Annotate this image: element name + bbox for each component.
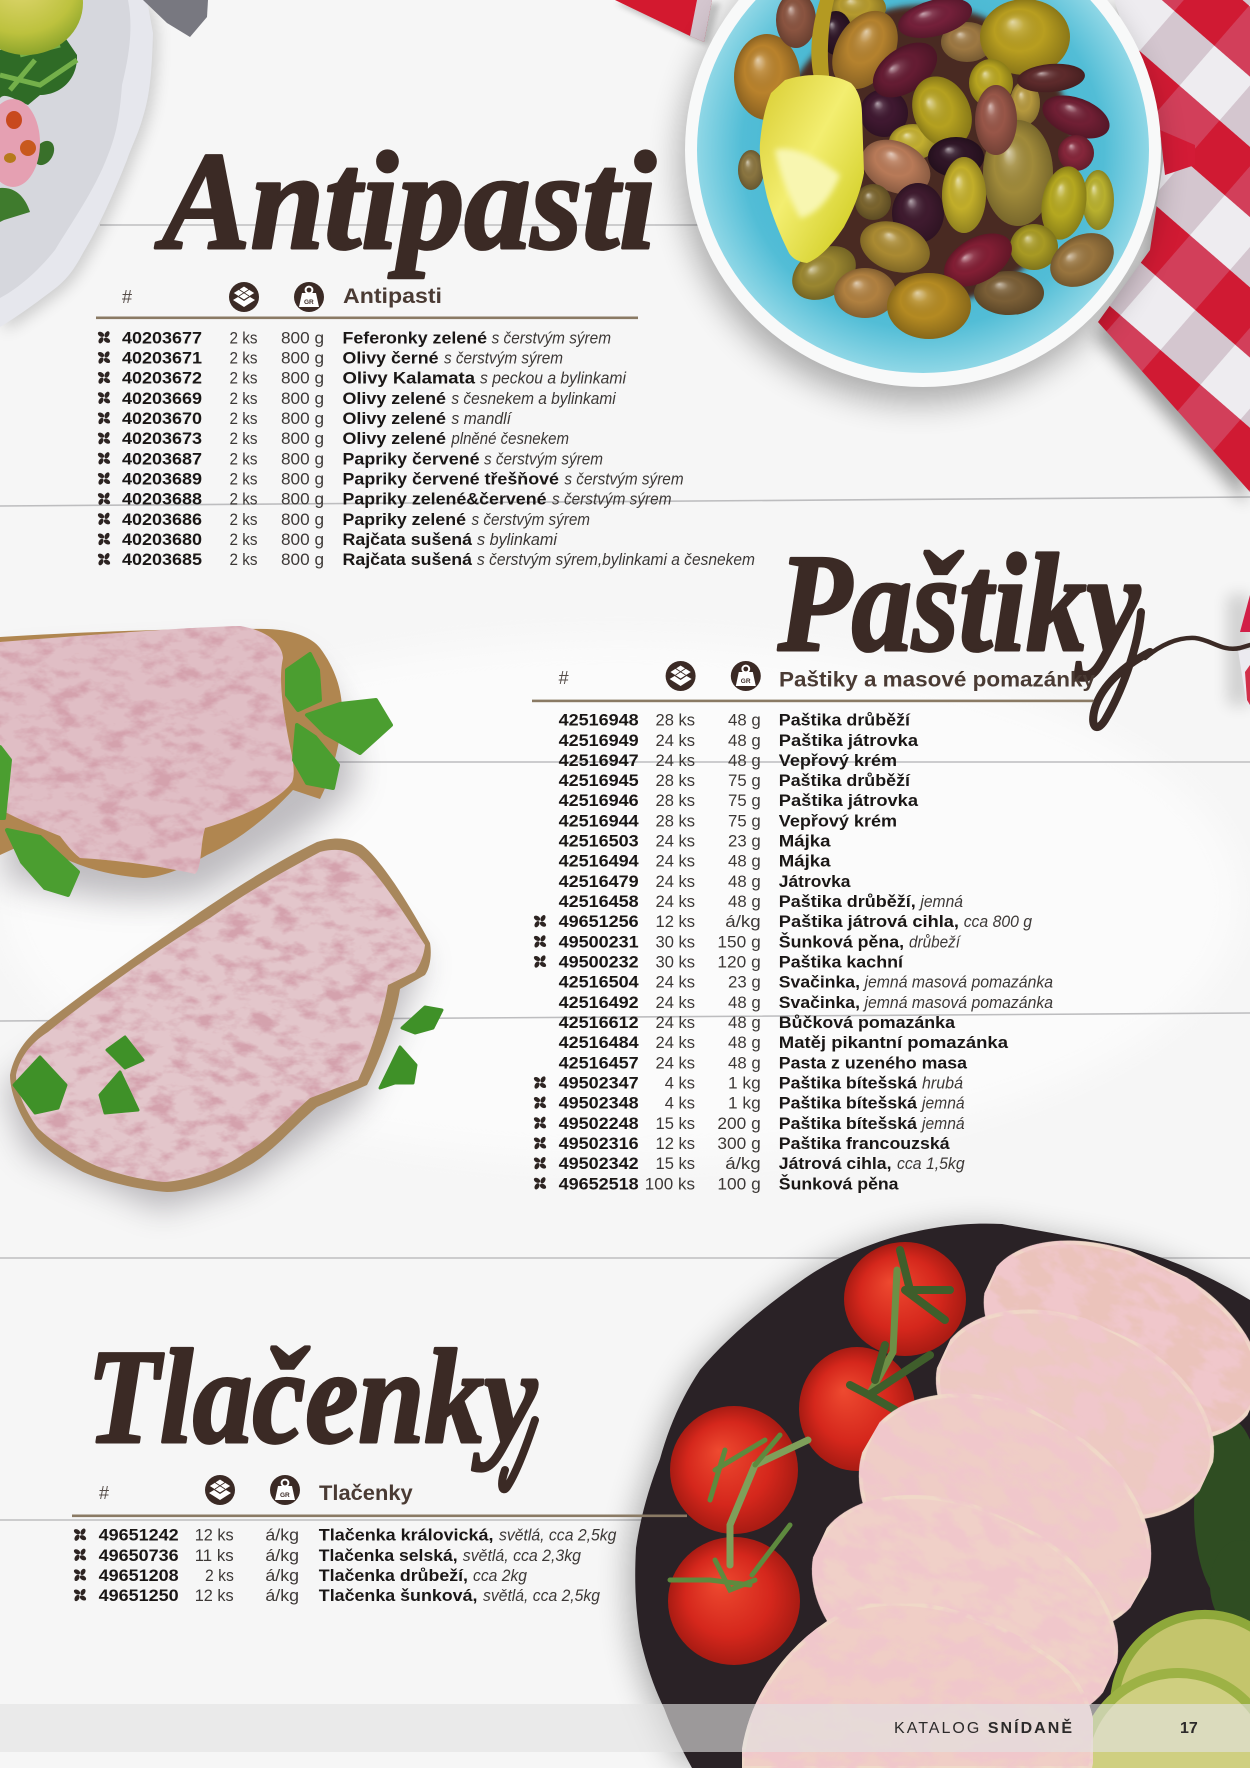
pepper (760, 0, 864, 263)
row 49502342: 15 ks (656, 1154, 695, 1173)
row 42516494: Májka (779, 852, 831, 871)
row 49651242: 49651242 (99, 1526, 179, 1545)
row 42516946: Paštika játrovka (779, 791, 919, 810)
row 49650736: 49650736 (99, 1546, 179, 1565)
row 42516492: Svačinka, (779, 993, 860, 1012)
row 40203686 (97, 510, 590, 529)
row 42516492: 48 g (728, 993, 761, 1012)
row 49502348: 4 ks (665, 1094, 695, 1113)
table header: Antipasti (343, 285, 442, 308)
row 49502347: 49502347 (559, 1074, 639, 1092)
table header: GR (304, 299, 314, 306)
row 49650736: á/kg (265, 1546, 299, 1565)
row 40203673: Olivy zelené (342, 429, 446, 448)
row 49651250: á/kg (265, 1586, 299, 1605)
avocado half (0, 0, 83, 55)
row 40203670: Olivy zelené (342, 409, 446, 428)
row 42516944: 75 g (728, 811, 761, 830)
row 49502316: 300 g (717, 1134, 761, 1153)
row 40203685: 800 g (281, 550, 324, 569)
ham and tomato slice (0, 99, 40, 187)
row 49651256: 49651256 (559, 912, 639, 931)
row 49651250 (73, 1586, 601, 1605)
row 42516457: 48 g (728, 1053, 761, 1072)
row 49651208: á/kg (265, 1566, 299, 1585)
row 42516458: 48 g (728, 892, 761, 911)
photo: slate with tomatoes, meat slices and limes (629, 1203, 1250, 1768)
row 40203688: s čerstvým sýrem (552, 491, 672, 509)
row 42516457: Pasta z uzeného masa (779, 1053, 968, 1072)
row 42516945: 42516945 (559, 771, 639, 790)
table header (72, 1475, 687, 1517)
row 49502348: Paštika bítešská (779, 1094, 918, 1113)
row 49651208 (73, 1566, 528, 1585)
row 40203671: 40203671 (122, 348, 202, 368)
row 49502347: 4 ks (665, 1074, 695, 1092)
row 42516494: 24 ks (656, 852, 695, 871)
footer band (0, 1704, 1250, 1752)
photo: plate with salad, top left (0, 0, 208, 331)
row 42516484 (559, 1033, 1009, 1052)
row 49651208: cca 2kg (473, 1567, 528, 1585)
row 49650736: 11 ks (195, 1546, 234, 1565)
row 49502342: 49502342 (559, 1154, 639, 1173)
row 40203671: 2 ks (230, 348, 258, 368)
row 42516457 (559, 1053, 968, 1072)
row 40203677: 2 ks (230, 328, 258, 347)
row 40203670 (97, 409, 512, 428)
row 49650736: Tlačenka selská, (319, 1546, 458, 1565)
row 49502248: 49502248 (559, 1114, 639, 1133)
row 49502347: hrubá (922, 1074, 963, 1092)
row 49500231: 49500231 (559, 932, 639, 951)
row 42516492: 24 ks (656, 993, 695, 1012)
title: Tlačenky: Tlačenky (87, 1323, 538, 1472)
icon: fork handle (143, 0, 208, 37)
meat slices (742, 1203, 1250, 1768)
row 42516457: 24 ks (656, 1053, 695, 1072)
row 42516945: 75 g (728, 771, 761, 790)
row 49651208: 2 ks (205, 1566, 234, 1585)
row 42516458: jemná (919, 893, 963, 911)
row 42516612: 42516612 (559, 1013, 639, 1032)
row 42516944: 42516944 (559, 811, 639, 830)
row 49502316: 49502316 (559, 1134, 639, 1153)
row 42516945 (559, 771, 911, 790)
parsley leaves (14, 1007, 442, 1113)
row 40203680: s bylinkami (477, 531, 558, 549)
row 40203680: 800 g (281, 530, 324, 549)
row 42516479: Játrovka (779, 872, 851, 891)
row 42516612 (559, 1013, 956, 1032)
row 42516946 (559, 791, 919, 810)
row 42516612: Bůčková pomazánka (779, 1013, 956, 1032)
row 40203688 (97, 490, 672, 509)
row 49502248: 15 ks (656, 1114, 695, 1133)
row 40203685: 40203685 (122, 550, 202, 569)
row 49502342 (533, 1154, 965, 1173)
row 49502342: Játrová cihla, (779, 1154, 892, 1173)
row 49502348: jemná (920, 1095, 965, 1113)
row 49502347: 1 kg (728, 1074, 761, 1092)
row 40203688: 800 g (281, 490, 324, 509)
row 42516945: 28 ks (656, 771, 695, 790)
row 42516457: 42516457 (559, 1053, 639, 1072)
row 40203680: Rajčata sušená (342, 530, 473, 549)
row 40203686: 40203686 (122, 510, 202, 529)
row 40203671 (97, 348, 563, 368)
row 49651250: Tlačenka šunková, (319, 1586, 478, 1605)
row 40203670: 2 ks (230, 409, 258, 428)
row 42516948: Paštika drůběží (779, 711, 911, 730)
row 42516947: 24 ks (656, 751, 695, 770)
table header: GR (280, 1492, 290, 1499)
table header: # (99, 1483, 109, 1503)
row 49502248: Paštika bítešská (779, 1114, 918, 1133)
row 40203672: s peckou a bylinkami (480, 370, 627, 388)
photo: toast with pate, upper (0, 626, 391, 899)
table header: GR (741, 678, 751, 685)
row 49502348: 1 kg (728, 1094, 761, 1113)
photo: bowl of olives and pepper (680, 0, 1161, 403)
row 40203685: s čerstvým sýrem,bylinkami a česnekem (477, 551, 755, 569)
row 40203689: 2 ks (230, 470, 258, 488)
row 40203689: 800 g (281, 470, 324, 488)
row 49500231: 30 ks (656, 932, 695, 951)
row 40203672 (97, 369, 627, 388)
row 42516949: 48 g (728, 731, 761, 750)
row 49500231: Šunková pěna, (779, 932, 904, 951)
row 49651250: 12 ks (195, 1586, 234, 1605)
row 42516949 (559, 731, 919, 750)
row 49502348 (533, 1094, 965, 1113)
row 42516503: 23 g (728, 832, 761, 851)
row 49502316: Paštika francouzská (779, 1134, 950, 1153)
row 49650736: světlá, cca 2,3kg (463, 1547, 582, 1565)
row 40203685: Rajčata sušená (342, 550, 473, 569)
row 40203686: 800 g (281, 510, 324, 529)
row 40203689: Papriky červené třešňové (342, 470, 559, 488)
row 42516504: Svačinka, (779, 973, 860, 992)
row 42516944: 28 ks (656, 811, 695, 830)
row 40203677 (97, 328, 611, 347)
row 42516479: 42516479 (559, 872, 639, 891)
row 42516504: jemná masová pomazánka (863, 974, 1053, 992)
row 42516503: Májka (779, 832, 831, 851)
row 49502347: Paštika bítešská (779, 1074, 918, 1092)
row 49651242: Tlačenka královická, (319, 1526, 494, 1545)
row 40203673: 40203673 (122, 429, 202, 448)
row 42516484: 48 g (728, 1033, 761, 1052)
table header: Paštiky a masové pomazánky (779, 669, 1095, 692)
row 42516946: 28 ks (656, 791, 695, 810)
row 40203670: s mandlí (451, 410, 512, 428)
row 49652518: Šunková pěna (779, 1174, 899, 1193)
row 49500232: 30 ks (656, 952, 695, 972)
row 42516479 (559, 872, 851, 891)
row 40203669: 2 ks (230, 389, 258, 408)
row 42516458: Paštika drůběží, (779, 892, 916, 911)
row 42516947: 48 g (728, 751, 761, 770)
row 42516458 (559, 892, 963, 911)
table header (96, 282, 638, 319)
row 49502248: jemná (920, 1115, 965, 1133)
row 40203670: 40203670 (122, 409, 202, 428)
row 49500231 (533, 932, 961, 951)
row 42516503: 24 ks (656, 832, 695, 851)
row 42516946: 42516946 (559, 791, 639, 810)
row 40203677: 800 g (281, 328, 324, 347)
row 49651256 (533, 912, 1033, 931)
row 40203669 (97, 389, 617, 408)
title: Antipasti: Antipasti (154, 124, 656, 279)
row 49502342: á/kg (725, 1154, 761, 1173)
row 49500232 (533, 952, 904, 972)
row 49651250: 49651250 (99, 1586, 179, 1605)
row 40203669: 800 g (281, 389, 324, 408)
row 40203688: Papriky zelené&červené (342, 490, 546, 509)
table header (532, 661, 1095, 702)
row 40203687: 2 ks (230, 449, 258, 468)
row 40203672: Olivy Kalamata (342, 369, 476, 388)
row 42516947: Vepřový krém (779, 751, 897, 770)
row 40203686: s čerstvým sýrem (472, 511, 590, 529)
row 40203669: s česnekem a bylinkami (451, 390, 617, 408)
row 49500231: drůbeží (909, 933, 961, 951)
row 42516947 (559, 751, 897, 770)
row 40203687: 40203687 (122, 449, 202, 468)
row 49500232: Paštika kachní (779, 952, 904, 972)
table: Tlačenky (72, 1475, 687, 1605)
row 49652518: 100 ks (645, 1174, 695, 1193)
row 42516504: 42516504 (559, 973, 639, 992)
row 49651256: cca 800 g (964, 913, 1033, 931)
title: Paštiky (777, 526, 1250, 727)
row 40203671: Olivy černé (342, 348, 438, 368)
row 49651256: Paštika játrová cihla, (779, 912, 959, 931)
cilantro (1194, 1418, 1250, 1630)
row 49500232: 120 g (717, 952, 761, 972)
row 42516948 (559, 711, 911, 730)
row 40203680: 2 ks (230, 530, 258, 549)
limes (1078, 1610, 1250, 1768)
row 49500232: 49500232 (559, 952, 639, 972)
row 40203680 (97, 530, 558, 549)
row 42516494 (559, 852, 831, 871)
row 42516484: 42516484 (559, 1033, 639, 1052)
row 42516945: Paštika drůběží (779, 771, 911, 790)
row 40203680: 40203680 (122, 530, 202, 549)
row 49502248: 200 g (717, 1114, 761, 1133)
row 42516948: 42516948 (559, 711, 639, 730)
row 40203688: 2 ks (230, 490, 258, 509)
row 49651242 (73, 1526, 617, 1545)
row 49502347 (533, 1074, 963, 1092)
row 40203670: 800 g (281, 409, 324, 428)
row 40203686: Papriky zelené (342, 510, 466, 529)
row 40203671: s čerstvým sýrem (444, 350, 563, 368)
row 42516944: Vepřový krém (779, 811, 897, 830)
row 40203687: s čerstvým sýrem (484, 450, 603, 468)
row 49651242: á/kg (265, 1526, 299, 1545)
row 42516484: 24 ks (656, 1033, 695, 1052)
row 40203673: 800 g (281, 429, 324, 448)
salad greens (0, 30, 77, 222)
row 42516458: 24 ks (656, 892, 695, 911)
row 49652518: 49652518 (559, 1174, 639, 1193)
photo: napkin corner at right edge (1228, 595, 1250, 710)
row 42516494: 48 g (728, 852, 761, 871)
row 49652518 (533, 1174, 899, 1193)
row 40203671: 800 g (281, 348, 324, 368)
row 40203677: s čerstvým sýrem (492, 329, 611, 347)
row 42516504 (559, 973, 1053, 992)
row 40203686: 2 ks (230, 510, 258, 529)
photo: toast with pate, lower (4, 838, 442, 1210)
title: Paštiky: Paštiky (777, 526, 1141, 681)
row 49650736 (73, 1546, 582, 1565)
row 42516504: 23 g (728, 973, 761, 992)
row 40203677: 40203677 (122, 328, 202, 347)
table: Antipasti (96, 282, 755, 569)
row 40203669: 40203669 (122, 389, 202, 408)
row 40203672: 40203672 (122, 369, 202, 388)
row 49651250: světlá, cca 2,5kg (483, 1587, 601, 1605)
tomatoes (668, 1242, 966, 1665)
row 40203687: 800 g (281, 449, 324, 468)
table header: # (559, 668, 569, 688)
row 49502316 (533, 1134, 950, 1153)
row 42516492 (559, 993, 1053, 1012)
table: Paštiky a masové pomazánky (532, 661, 1095, 1193)
row 40203687: Papriky červené (342, 449, 480, 468)
row 42516944 (559, 811, 897, 830)
row 42516612: 24 ks (656, 1013, 695, 1032)
row 42516479: 24 ks (656, 872, 695, 891)
row 49502342: cca 1,5kg (897, 1155, 965, 1173)
row 49651256: 12 ks (656, 912, 695, 931)
row 40203685 (97, 550, 755, 569)
tomato stems (670, 1250, 950, 1590)
row 42516612: 48 g (728, 1013, 761, 1032)
row 40203689: s čerstvým sýrem (564, 470, 684, 488)
row 49651208: 49651208 (99, 1566, 179, 1585)
row 40203672: 800 g (281, 369, 324, 388)
row 42516948: 48 g (728, 711, 761, 730)
row 42516484: Matěj pikantní pomazánka (779, 1033, 1009, 1052)
row 40203673: 2 ks (230, 429, 258, 448)
row 42516503 (559, 832, 831, 851)
row 42516479: 48 g (728, 872, 761, 891)
row 42516504: 24 ks (656, 973, 695, 992)
table header: # (122, 287, 132, 307)
photo: checkered napkin (615, 0, 1250, 503)
row 40203672: 2 ks (230, 369, 258, 388)
row 49502348: 49502348 (559, 1094, 639, 1113)
row 49651242: 12 ks (195, 1526, 234, 1545)
row 40203685: 2 ks (230, 550, 258, 569)
table header: Tlačenky (319, 1482, 413, 1505)
parsley leaves (0, 654, 391, 895)
row 40203669: Olivy zelené (342, 389, 446, 408)
row 42516949: 24 ks (656, 731, 695, 750)
row 40203689: 40203689 (122, 470, 202, 488)
row 42516948: 28 ks (656, 711, 695, 730)
row 49502248 (533, 1114, 965, 1133)
row 42516492: 42516492 (559, 993, 639, 1012)
row 40203689 (97, 470, 684, 488)
row 40203673: plněné česnekem (450, 430, 569, 448)
row 42516949: 42516949 (559, 731, 639, 750)
row 40203688: 40203688 (122, 490, 202, 509)
row 49500231: 150 g (717, 932, 761, 951)
row 49652518: 100 g (717, 1174, 761, 1193)
row 42516949: Paštika játrovka (779, 731, 919, 750)
row 42516947: 42516947 (559, 751, 639, 770)
row 40203673 (97, 429, 569, 448)
row 49651208: Tlačenka drůbeží, (319, 1566, 468, 1585)
row 42516503: 42516503 (559, 832, 639, 851)
row 42516458: 42516458 (559, 892, 639, 911)
row 40203687 (97, 449, 603, 468)
page number: 17 (1180, 1720, 1198, 1737)
row 49651256: á/kg (725, 912, 761, 931)
catalog name: KATALOG SNÍDANĚ (894, 1718, 1072, 1737)
row 49502316: 12 ks (656, 1134, 695, 1153)
row 42516494: 42516494 (559, 852, 639, 871)
row 49651242: světlá, cca 2,5kg (499, 1527, 617, 1545)
row 40203677: Feferonky zelené (342, 328, 487, 347)
row 42516946: 75 g (728, 791, 761, 810)
row 42516492: jemná masová pomazánka (863, 994, 1053, 1012)
